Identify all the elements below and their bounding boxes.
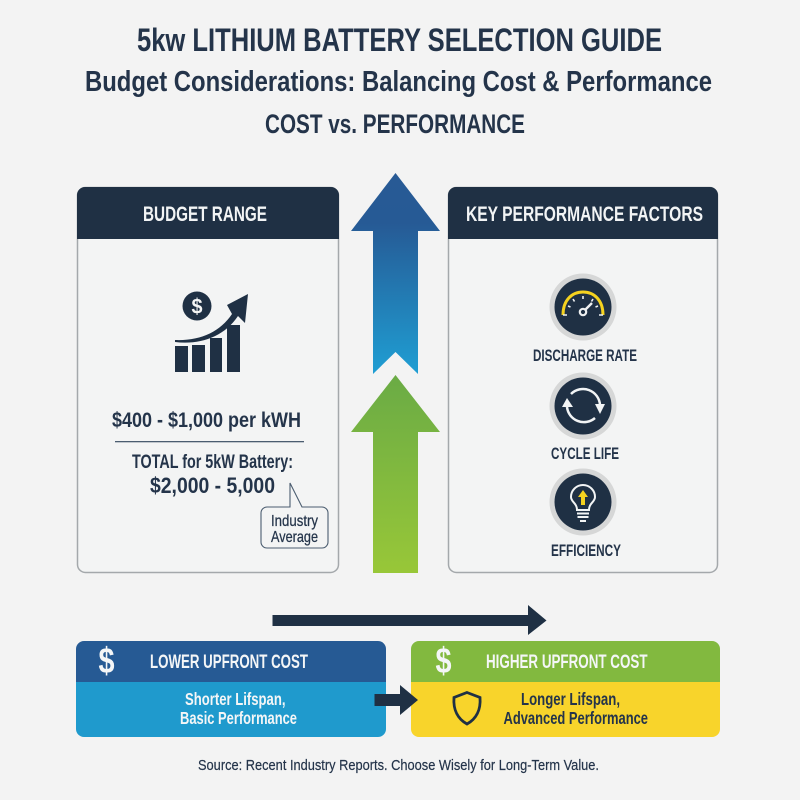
text: lower cost trade-off: Shorter Lifspan, <box>185 689 286 709</box>
icon: dollar sign: $ <box>436 640 452 681</box>
icon: efficiency bulb <box>550 468 616 536</box>
text: higher cost benefit <box>504 689 648 728</box>
arrow: cost direction <box>272 605 546 635</box>
callout: industry average: Industry <box>271 513 318 530</box>
icon: rising cost chart <box>175 292 248 372</box>
callout: industry average: Average <box>271 529 318 546</box>
main title: 5kw LITHIUM BATTERY SELECTION GUIDE <box>137 22 662 58</box>
icon: discharge gauge <box>550 274 616 340</box>
title block <box>85 22 712 139</box>
icon: shield <box>454 692 480 724</box>
total price: $2,000 - 5,000 <box>150 473 275 498</box>
heading: higher upfront cost: HIGHER UPFRONT COST <box>486 652 648 673</box>
text: higher cost benefit: Advanced Performance <box>504 708 648 728</box>
text: lower cost trade-off <box>180 689 297 728</box>
panel header: key performance factors: KEY PERFORMANCE FACTORS <box>466 203 703 226</box>
comparison heading: COST vs. PERFORMANCE <box>265 109 525 139</box>
label: discharge rate: DISCHARGE RATE <box>533 347 637 365</box>
price per kWh: $400 - $1,000 per kWH <box>112 409 301 432</box>
icon: dollar sign: $ <box>98 640 114 681</box>
panel header: key performance factors <box>448 187 718 239</box>
panel: lower upfront cost <box>76 640 386 737</box>
total label: TOTAL for 5kW Battery: <box>132 451 293 473</box>
panel header: budget range <box>77 187 339 239</box>
icon: cycle arrows <box>550 372 616 440</box>
panel: budget range <box>77 187 339 572</box>
label: efficiency: EFFICIENCY <box>551 542 621 560</box>
source note: Source: Recent Industry Reports. Choose Wisely for Long-Term Value. <box>198 757 599 774</box>
heading: lower upfront cost: LOWER UPFRONT COST <box>150 652 308 673</box>
arrow: lower to higher <box>374 685 418 715</box>
arrow: green up arrow <box>351 375 440 573</box>
text: higher cost benefit: Longer Lifspan, <box>521 689 620 709</box>
text: lower cost trade-off: Basic Performance <box>180 708 297 728</box>
arrow: blue up arrow <box>351 173 440 374</box>
panel: key performance factors <box>448 187 718 572</box>
icon: rising cost chart: $ <box>192 296 203 318</box>
callout: industry average <box>261 483 328 548</box>
label: cycle life: CYCLE LIFE <box>551 445 619 463</box>
panel header: budget range: BUDGET RANGE <box>143 203 267 226</box>
panel: higher upfront cost <box>411 640 720 737</box>
